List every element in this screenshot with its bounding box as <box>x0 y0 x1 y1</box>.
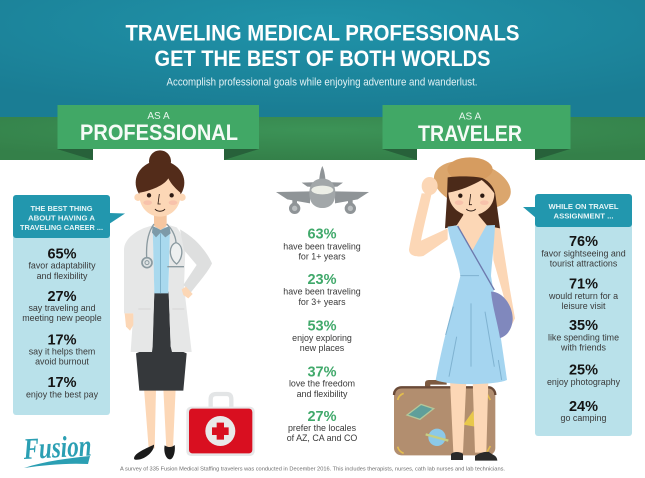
stat 35%: like spending time <box>548 332 619 342</box>
stat 35%: 35% <box>569 318 598 334</box>
right hand <box>182 287 193 298</box>
stat 23% <box>283 272 361 307</box>
stat 76%: favor sightseeing and <box>541 248 626 258</box>
stat 25% <box>547 362 621 387</box>
ribbon: as a traveler: AS A <box>459 112 481 122</box>
header background <box>0 0 645 160</box>
stat 35%: with friends <box>560 342 607 352</box>
stat 27% <box>22 289 102 323</box>
coat pockets <box>138 308 184 310</box>
stat 65%: 65% <box>47 246 77 262</box>
panel: center statistics <box>283 226 361 443</box>
stat 53%: enjoy exploring <box>292 333 352 343</box>
panel header with speech tail <box>13 195 125 238</box>
hat <box>428 153 516 217</box>
skirt <box>136 292 187 391</box>
stat 27% <box>287 409 357 443</box>
title: TRAVELING MEDICAL PROFESSIONALS <box>126 20 520 46</box>
panel header with speech tail <box>523 194 632 227</box>
facial features <box>455 193 489 211</box>
stethoscope <box>142 224 184 268</box>
stat 17% pay <box>26 375 99 400</box>
neck and chest <box>457 208 487 252</box>
stat 27%: say traveling and <box>28 303 96 313</box>
collar <box>152 226 171 237</box>
doctor illustration <box>124 150 212 460</box>
dress <box>436 225 507 384</box>
left hand <box>125 313 133 331</box>
icon: medical kit <box>186 394 255 456</box>
ears <box>134 194 142 201</box>
stat 63% <box>283 226 361 262</box>
stat 17% burnout: avoid burnout <box>35 356 89 366</box>
stat 71% <box>548 276 618 311</box>
panel header with speech tail: TRAVELING CAREER ... <box>20 223 103 232</box>
stat 25%: 25% <box>569 362 598 378</box>
stat 17% pay: enjoy the best pay <box>26 390 99 400</box>
icon: airplane <box>276 166 369 214</box>
hair <box>136 161 184 205</box>
stat 65%: and flexibility <box>37 271 88 281</box>
title: GET THE BEST OF BOTH WORLDS <box>154 46 490 71</box>
stat 24%: 24% <box>569 399 598 415</box>
stat 27%: of AZ, CA and CO <box>287 433 357 443</box>
dress folds <box>446 276 502 380</box>
panel header with speech tail: ABOUT HAVING A <box>28 214 96 222</box>
stat 37%: and flexibility <box>297 389 348 399</box>
logo: Fusion: Fusion <box>22 429 92 466</box>
stat 27%: prefer the locales <box>288 423 357 433</box>
stat 76%: tourist attractions <box>550 258 618 268</box>
coat: body and sleeves <box>124 225 154 352</box>
stat 17% burnout: 17% <box>47 332 77 348</box>
stat 71%: leisure visit <box>562 301 606 311</box>
hair bun <box>149 150 171 172</box>
stat 23%: 23% <box>307 272 337 288</box>
stat 23%: have been traveling <box>283 286 361 296</box>
stat 53%: new places <box>300 343 345 353</box>
stat 76%: 76% <box>569 234 598 250</box>
legs <box>144 388 176 448</box>
stat 17% burnout: say it helps them <box>29 346 95 356</box>
hand <box>422 177 438 195</box>
bag <box>458 226 494 290</box>
shoes <box>134 445 175 460</box>
ribbon: as a professional: PROFESSIONAL <box>80 120 238 145</box>
raised arm <box>409 193 448 256</box>
stat 63%: for 1+ years <box>298 252 346 262</box>
stat 35% <box>548 318 619 352</box>
stat 76% <box>541 234 626 268</box>
stat 17% pay: 17% <box>47 375 77 391</box>
shoes <box>451 452 497 461</box>
facial features <box>143 193 177 211</box>
panel: best thing about career <box>13 195 125 415</box>
stat 27%: 27% <box>47 289 77 305</box>
ribbon: as a professional: AS A <box>147 111 170 122</box>
stat 17% burnout <box>29 332 95 366</box>
shirt <box>153 227 170 293</box>
subtitle: Accomplish professional goals while enjoying adventure and wanderlust. <box>166 76 478 88</box>
stat 65%: favor adaptability <box>28 260 96 270</box>
ribbon: as a professional <box>57 105 259 160</box>
stat 23%: for 3+ years <box>298 297 346 307</box>
ribbon: as a traveler <box>382 105 570 160</box>
stat 63%: have been traveling <box>283 242 361 252</box>
panel header with speech tail: THE BEST THING <box>30 204 93 213</box>
stat 65% <box>28 246 96 281</box>
stat 24% <box>561 399 607 423</box>
stat 24%: go camping <box>561 413 607 423</box>
stat 37% <box>289 364 355 399</box>
legs <box>450 380 488 453</box>
stat 27%: meeting new people <box>22 313 102 323</box>
stat 71%: would return for a <box>548 291 618 301</box>
stat 53% <box>292 318 352 353</box>
ribbon: as a traveler: TRAVELER <box>418 121 522 146</box>
stat 25%: enjoy photography <box>547 377 621 387</box>
panel header with speech tail: WHILE ON TRAVEL <box>548 202 619 211</box>
panel: while on travel assignment <box>523 194 632 436</box>
stat 37%: love the freedom <box>289 378 355 388</box>
stat 37%: 37% <box>307 364 337 380</box>
hair <box>445 176 500 228</box>
stat 63%: 63% <box>307 226 337 242</box>
right arm <box>492 225 515 325</box>
neck <box>154 213 167 230</box>
face <box>448 180 494 215</box>
title <box>126 20 520 71</box>
suitcase <box>394 380 495 455</box>
stat 71%: 71% <box>569 276 598 292</box>
face <box>139 178 180 217</box>
panel header with speech tail: ASSIGNMENT ... <box>554 212 614 220</box>
footnote: A survey of 335 Fusion Medical Staffing travelers was conducted in December 2016. This includes therapists, nurses, cath lab nurses and lab technicians. <box>120 466 505 472</box>
traveler illustration <box>394 153 516 461</box>
stat 53%: 53% <box>307 318 337 334</box>
stat 27%: 27% <box>307 409 337 425</box>
